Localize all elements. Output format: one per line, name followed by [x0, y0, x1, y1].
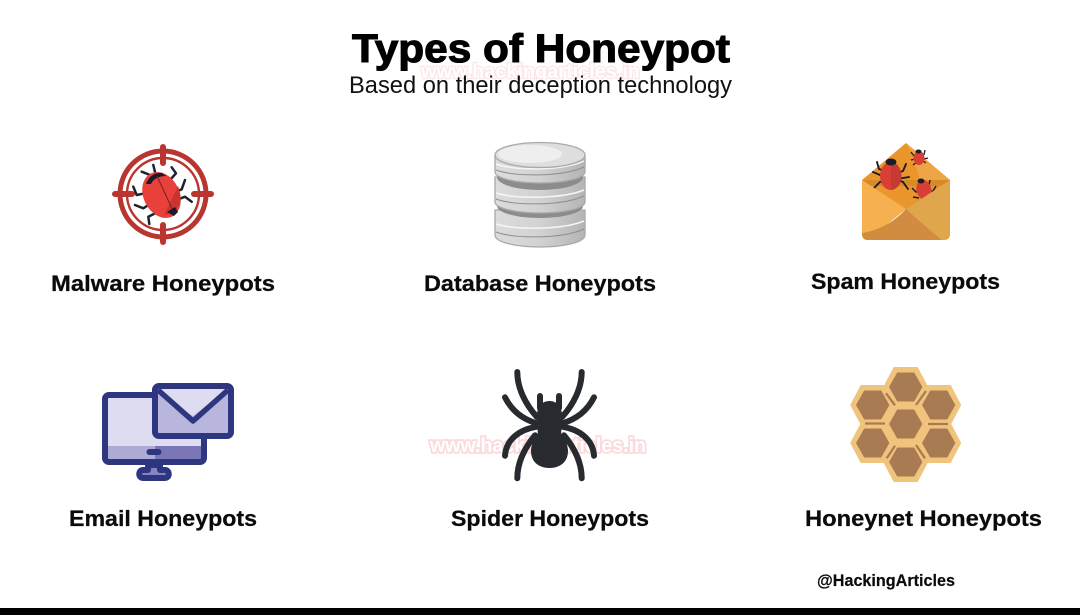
database: middle disc [495, 164, 585, 213]
watermark: top: www.hackingarticles.in [420, 61, 640, 83]
label: honeynet: Honeynet Honeypots [805, 506, 1042, 531]
label: malware: Malware Honeypots [51, 271, 275, 296]
subtitle: Based on their deception technology [349, 72, 732, 99]
database: bottom disc [495, 194, 585, 247]
bug 2 [911, 150, 928, 165]
icon: spider [505, 372, 594, 478]
label: email: Email Honeypots [69, 506, 257, 531]
footer bar [0, 608, 1080, 615]
icon: database [495, 142, 585, 247]
envelope: right panel [906, 180, 950, 240]
icon: spam envelope with bugs [862, 143, 950, 240]
label: spam: Spam Honeypots [811, 269, 1000, 294]
envelope: left panel [862, 180, 906, 240]
icon: honeycomb [850, 367, 961, 482]
label: database: Database Honeypots [424, 271, 656, 296]
icon: email monitor [105, 386, 231, 478]
title: Types of Honeypot [352, 27, 730, 71]
envelope: bottom flap [862, 209, 942, 240]
label: spider: Spider Honeypots [451, 506, 649, 531]
bug 1 [873, 158, 909, 190]
watermark: center: www.hackingarticles.in [429, 435, 646, 457]
bug 3 [912, 178, 936, 202]
database: top disc [495, 142, 585, 183]
icon: malware target with bug [115, 147, 211, 242]
credit: handle: @HackingArticles [817, 572, 955, 590]
